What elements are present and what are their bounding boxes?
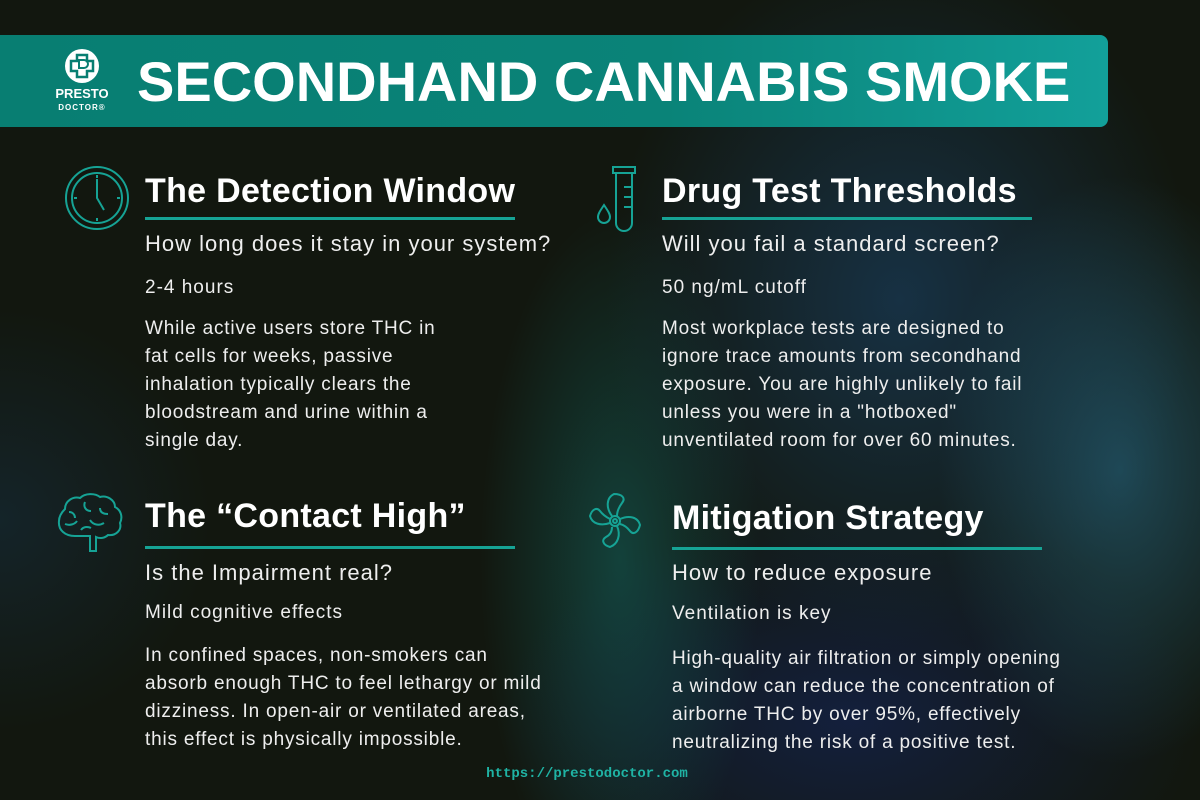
subheading: How long does it stay in your system? [145, 231, 551, 256]
heading: The Detection Window [145, 172, 515, 210]
logo: DOCTOR® [58, 103, 106, 112]
body [145, 318, 436, 451]
body: fat cells for weeks, passive [145, 346, 393, 367]
icon: brain [58, 493, 122, 552]
body: While active users store THC in [145, 318, 436, 339]
body: High-quality air filtration or simply opening [672, 648, 1061, 669]
value: Mild cognitive effects [145, 602, 343, 623]
panel: contact high [58, 493, 542, 750]
body: a window can reduce the concentration of [672, 676, 1055, 697]
body [662, 318, 1022, 451]
icon: test tube [597, 166, 636, 232]
panel: drug test thresholds [597, 166, 1032, 451]
body: neutralizing the risk of a positive test. [672, 732, 1016, 753]
body: single day. [145, 430, 243, 451]
subheading: How to reduce exposure [672, 560, 932, 585]
body: dizziness. In open-air or ventilated areas, [145, 701, 526, 722]
logo: PRESTO [55, 86, 109, 101]
icon: fan [589, 493, 641, 548]
body: bloodstream and urine within a [145, 402, 428, 423]
icon: clock [65, 166, 129, 230]
body: inhalation typically clears the [145, 374, 412, 395]
heading: Drug Test Thresholds [662, 172, 1017, 210]
footer url: https://prestodoctor.com [486, 766, 688, 782]
heading: Mitigation Strategy [672, 499, 984, 537]
heading: The “Contact High” [145, 497, 466, 535]
title text: SECONDHAND CANNABIS SMOKE [137, 50, 1070, 113]
panel: mitigation strategy [589, 493, 1061, 753]
body: Most workplace tests are designed to [662, 318, 1004, 339]
subheading: Will you fail a standard screen? [662, 231, 1000, 256]
body: this effect is physically impossible. [145, 729, 463, 750]
body: absorb enough THC to feel lethargy or mild [145, 673, 542, 694]
value: Ventilation is key [672, 603, 832, 624]
body: exposure. You are highly unlikely to fail [662, 374, 1022, 395]
logo [55, 49, 109, 112]
panel: detection window [65, 166, 551, 451]
value: 50 ng/mL cutoff [662, 277, 807, 298]
body [672, 648, 1061, 753]
value: 2-4 hours [145, 277, 234, 298]
body: unless you were in a "hotboxed" [662, 402, 957, 423]
body: ignore trace amounts from secondhand [662, 346, 1021, 367]
subheading: Is the Impairment real? [145, 560, 393, 585]
body: In confined spaces, non-smokers can [145, 645, 488, 666]
body [145, 645, 542, 750]
title banner [0, 35, 1108, 127]
body: airborne THC by over 95%, effectively [672, 704, 1021, 725]
body: unventilated room for over 60 minutes. [662, 430, 1017, 451]
